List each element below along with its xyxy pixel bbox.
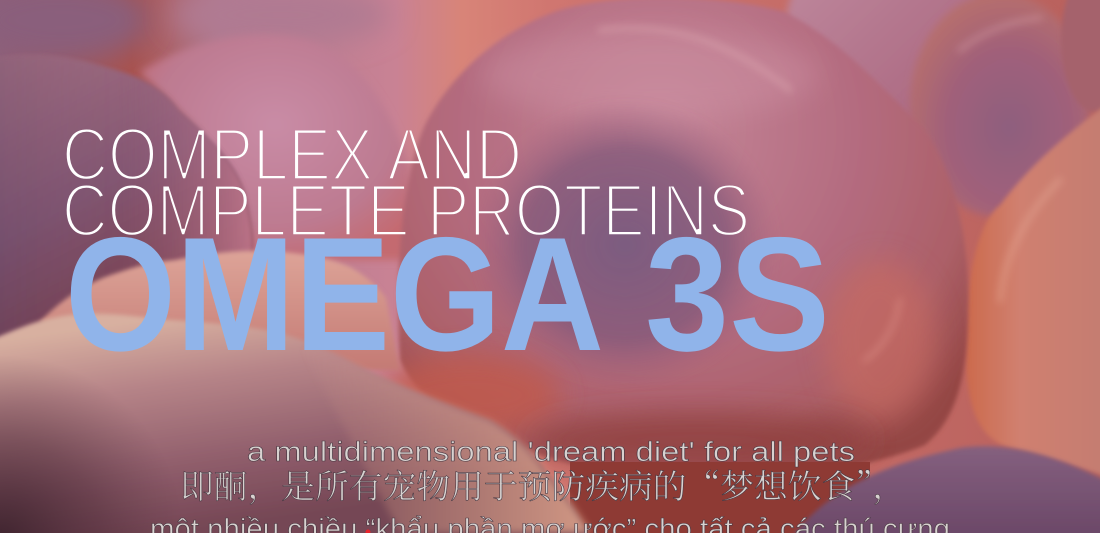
cell: lower purple: [795, 446, 1100, 533]
heading: omega 3s: OMEGA: [65, 204, 604, 385]
cell: far right upper: [910, 0, 1090, 217]
heading: complete proteins: [66, 186, 746, 235]
cell: far right corner: [1061, 0, 1100, 112]
cell nucleus: [470, 100, 780, 390]
cell: large central: [398, 0, 968, 480]
cell highlights: [600, 18, 1060, 360]
heading: complex and: [66, 130, 518, 179]
cell: mid left band: [40, 251, 400, 370]
heading: omega 3s: 3S: [645, 204, 830, 385]
subtitle: english: a multidimensional 'dream diet' for all pets: [247, 436, 855, 467]
cell: far right lower: [966, 95, 1100, 480]
cell: top centre: [140, 35, 410, 260]
cell: left: [0, 55, 252, 345]
cell: top right: [785, 0, 985, 125]
red dot: [366, 530, 370, 533]
subtitle: chinese: 即酮，是所有宠物用于预防疾病的“梦想饮食”，: [180, 461, 906, 508]
cell: bottom left: [0, 314, 590, 533]
